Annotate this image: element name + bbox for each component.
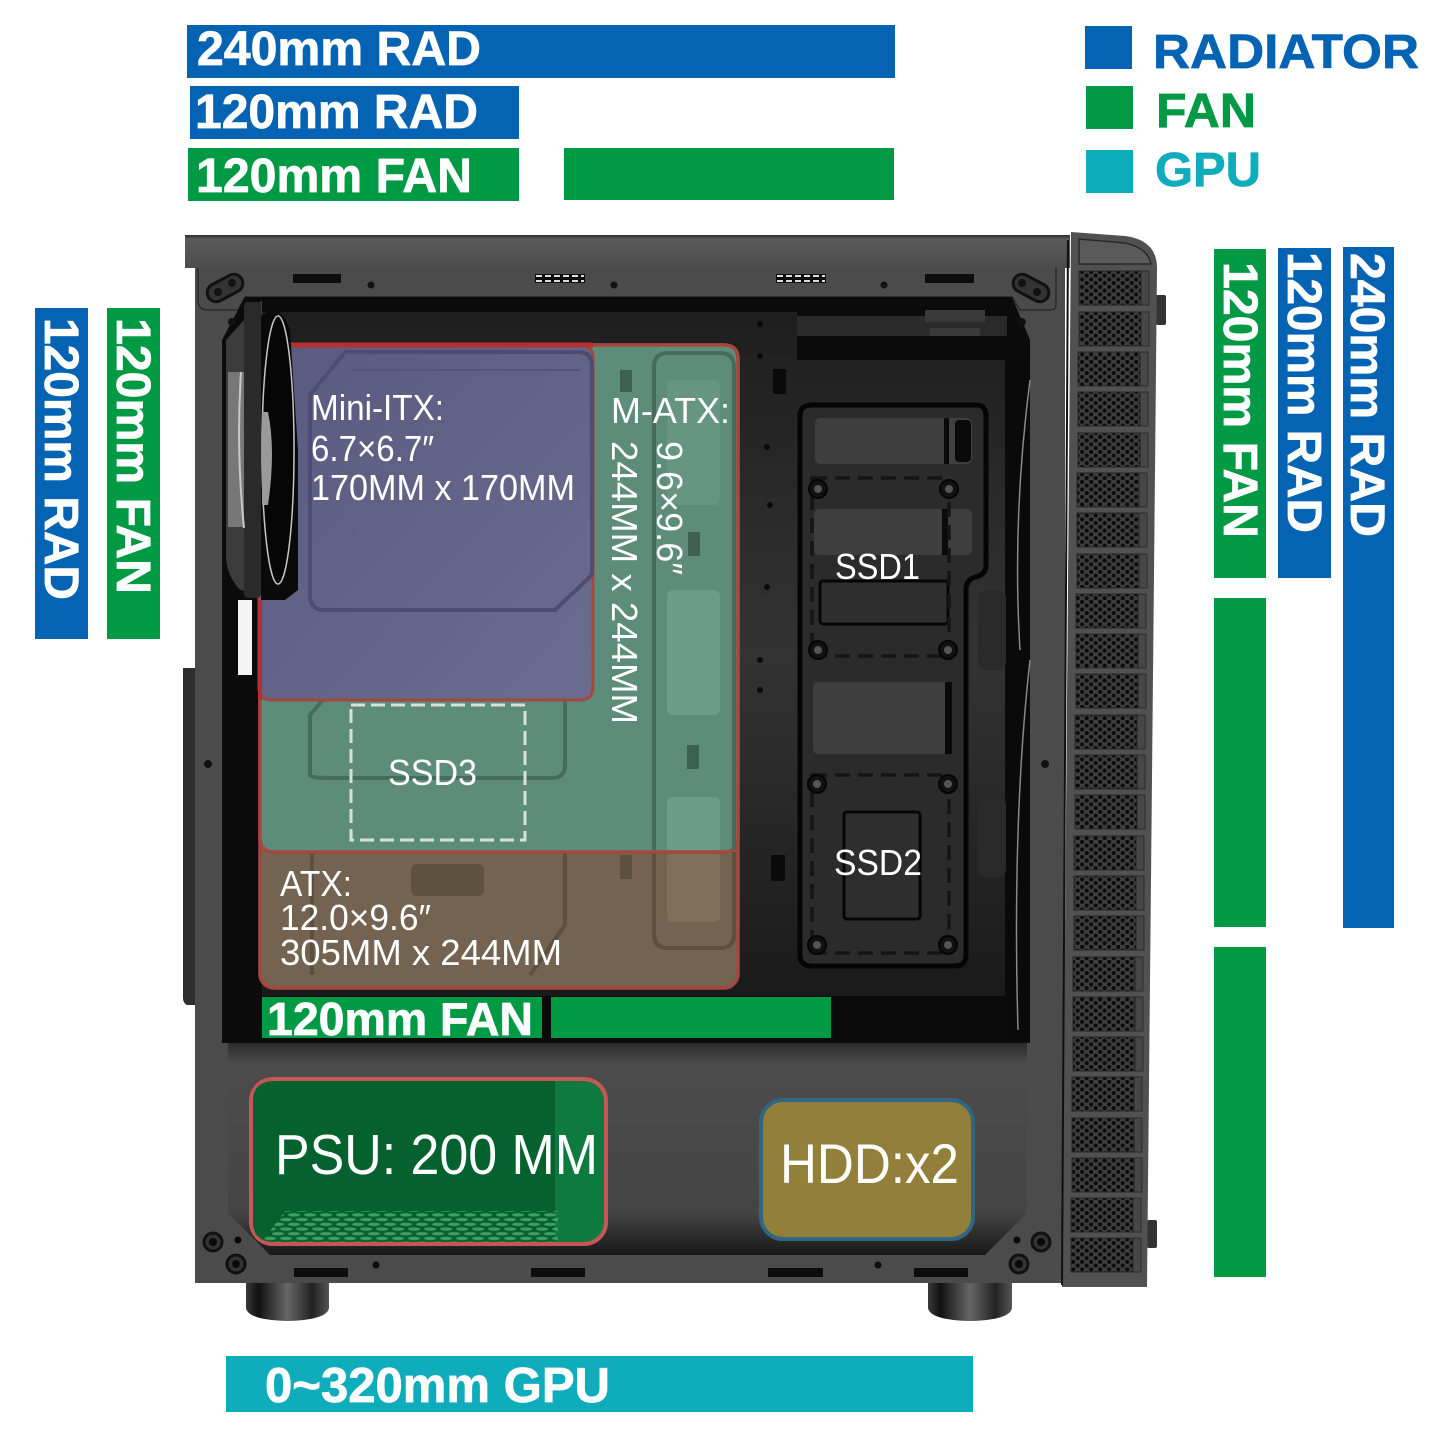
front mesh panels — [1071, 271, 1141, 1272]
dashed SSD outlines — [812, 478, 949, 953]
top bar: 120mm fan: 120mm FAN — [196, 150, 472, 203]
front fan strip — [978, 360, 1030, 1040]
bracket screws — [808, 480, 958, 954]
rear fan — [226, 300, 298, 600]
left side bump — [183, 668, 198, 1005]
top slots — [293, 274, 974, 283]
M-ATX label: M-ATX: — [611, 390, 730, 431]
bottom bar: GPU: 0~320mm GPU — [265, 1359, 610, 1413]
top screw brackets — [204, 271, 1052, 305]
right bar: 120mm radiator: 120mm RAD — [1277, 252, 1330, 533]
interior window — [222, 297, 1030, 1043]
ATX label: 305MM x 244MM — [280, 932, 562, 973]
Mini-ITX label: 170MM x 170MM — [311, 467, 575, 508]
right bar: third fan slot — [1214, 947, 1266, 1277]
PSU zone: PSU: 200 MM — [275, 1123, 598, 1187]
front panel side strips — [1133, 271, 1149, 1272]
case feet — [246, 1280, 1012, 1321]
HDD zone: HDD:x2 — [780, 1132, 959, 1195]
left bar: 120mm radiator: 120mm RAD — [34, 318, 87, 600]
M-ATX label: 244MM x 244MM — [604, 441, 645, 724]
side latch screws — [1147, 295, 1166, 1248]
top plate line — [198, 268, 1056, 310]
legend: GPU — [1086, 144, 1261, 197]
inner fan bar: 120mm FAN — [267, 993, 533, 1045]
right bar: 120mm fan: 120mm FAN — [1213, 262, 1266, 538]
top bar: 240mm radiator — [187, 23, 895, 78]
top bar: second fan slot — [564, 148, 894, 200]
legend: GPU: GPU — [1155, 144, 1261, 197]
case shell — [195, 262, 1065, 1283]
right bar: 240mm radiator: 240mm RAD — [1340, 253, 1393, 537]
tray holes — [757, 321, 786, 881]
SSD2 mount plate — [844, 812, 920, 919]
M-ATX zone — [260, 345, 738, 852]
HDD zone — [761, 1100, 973, 1239]
top slot vents — [536, 276, 825, 281]
bottom corner screws and slots — [204, 1233, 1050, 1277]
bottom bar: GPU — [226, 1356, 973, 1413]
Mini-ITX label: Mini-ITX: — [311, 387, 444, 428]
SSD3 dashed outline — [351, 705, 525, 840]
top edge — [185, 235, 1070, 268]
top bar: 240mm radiator: 240mm RAD — [197, 23, 481, 76]
top rear hardware — [797, 310, 1007, 336]
legend — [1085, 25, 1419, 197]
ATX label — [280, 863, 562, 973]
front panel — [1062, 232, 1157, 1287]
right bar: second fan slot — [1214, 598, 1266, 927]
motherboard tray — [262, 312, 1012, 996]
ATX zone — [260, 345, 738, 988]
ATX label: ATX: — [280, 863, 352, 904]
white gap — [238, 600, 252, 675]
SSD bracket — [800, 405, 986, 966]
M-ATX label — [604, 390, 730, 724]
inner fan slot — [551, 997, 831, 1038]
top bar: 120mm radiator: 120mm RAD — [195, 86, 478, 139]
Mini-ITX label: 6.7×6.7″ — [311, 428, 434, 469]
right bar: 240mm radiator — [1340, 247, 1394, 928]
SSD1 mount plate — [820, 581, 948, 624]
M-ATX label: 9.6×9.6″ — [649, 441, 690, 575]
SSD3 label: SSD3 — [388, 752, 477, 793]
legend: fan: FAN — [1156, 85, 1256, 138]
legend: fan — [1086, 85, 1256, 138]
PSU shroud — [228, 1043, 1027, 1255]
legend: radiator: RADIATOR — [1153, 25, 1419, 79]
PC case — [183, 232, 1166, 1321]
left bar: 120mm fan: 120mm FAN — [106, 318, 159, 594]
PSU zone — [251, 1079, 606, 1244]
SSD2 label: SSD2 — [834, 842, 922, 883]
bracket cutouts — [813, 418, 972, 754]
Mini-ITX zone — [259, 345, 593, 700]
ATX label: 12.0×9.6″ — [280, 897, 431, 938]
Mini-ITX label — [311, 387, 575, 508]
SSD1 label: SSD1 — [835, 546, 920, 587]
